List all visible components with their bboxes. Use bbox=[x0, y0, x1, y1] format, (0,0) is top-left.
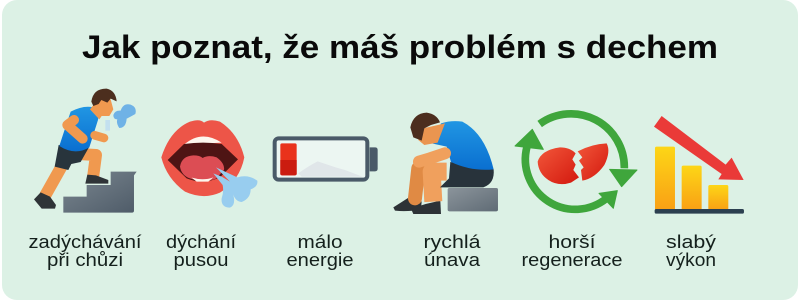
label: horší regenerace: horší bbox=[548, 232, 596, 252]
label: málo energie: málo bbox=[298, 232, 342, 252]
stone seat bbox=[448, 188, 498, 211]
icon: open mouth exhaling bbox=[161, 120, 257, 208]
rear arm bbox=[67, 120, 83, 139]
label: málo energie bbox=[286, 232, 354, 270]
front forearm bbox=[95, 135, 104, 138]
head bbox=[90, 99, 113, 119]
stairs bbox=[63, 172, 137, 213]
icon: runner on stairs out of breath bbox=[34, 89, 137, 213]
icon: recovery cycle around broken muscle bbox=[515, 114, 637, 209]
breath cloud bbox=[113, 104, 136, 128]
label: horší regenerace bbox=[522, 232, 622, 270]
shoes bbox=[393, 197, 422, 211]
upper teeth bbox=[184, 136, 222, 145]
label: dýchání pusou: pusou bbox=[174, 250, 228, 270]
bars bbox=[655, 147, 675, 210]
broken muscle: right half bbox=[578, 143, 608, 181]
label: rychlá únava: únava bbox=[424, 250, 481, 270]
label: zadýchávání při chůzi bbox=[28, 232, 142, 270]
torso bbox=[432, 121, 494, 170]
mouth interior bbox=[168, 143, 238, 181]
red charge level bbox=[280, 143, 297, 175]
shorts bbox=[55, 145, 89, 170]
label: slabý výkon: výkon bbox=[666, 250, 716, 270]
label: málo energie: energie bbox=[286, 250, 354, 270]
back leg bbox=[45, 163, 63, 195]
label: slabý výkon bbox=[666, 232, 716, 270]
thigh and near shin bbox=[432, 172, 447, 202]
head bbox=[418, 123, 445, 145]
arm bbox=[419, 153, 445, 162]
label: dýchání pusou: dýchání bbox=[166, 232, 236, 252]
far shin bbox=[415, 168, 418, 198]
shorts bbox=[440, 162, 494, 187]
baseline bbox=[655, 209, 744, 214]
falling red arrow bbox=[654, 116, 744, 180]
label: horší regenerace: regenerace bbox=[522, 250, 622, 270]
lower teeth bbox=[192, 177, 213, 182]
battery casing bbox=[275, 138, 367, 180]
tongue bbox=[180, 155, 224, 181]
title: Jak poznat, že máš problém s dechem bbox=[82, 29, 718, 65]
front leg bbox=[78, 154, 96, 175]
icon: low battery bbox=[275, 138, 378, 180]
green cycle arrows bbox=[525, 114, 624, 209]
label: dýchání pusou bbox=[166, 232, 236, 270]
faint glare bbox=[298, 161, 362, 177]
label: zadýchávání při chůzi: zadýchávání bbox=[28, 232, 142, 252]
label: rychlá únava: rychlá bbox=[424, 232, 482, 252]
label: rychlá únava bbox=[424, 232, 482, 270]
torso bbox=[59, 107, 98, 151]
label: zadýchávání při chůzi: při chůzi bbox=[47, 250, 123, 270]
exhaled air bbox=[213, 167, 257, 208]
broken muscle: left half bbox=[538, 147, 579, 184]
label: slabý výkon: slabý bbox=[666, 232, 716, 252]
battery terminal bbox=[370, 147, 378, 171]
icon: declining performance chart bbox=[654, 116, 744, 214]
lips bbox=[161, 120, 244, 196]
icon: exhausted seated man bbox=[393, 113, 498, 214]
